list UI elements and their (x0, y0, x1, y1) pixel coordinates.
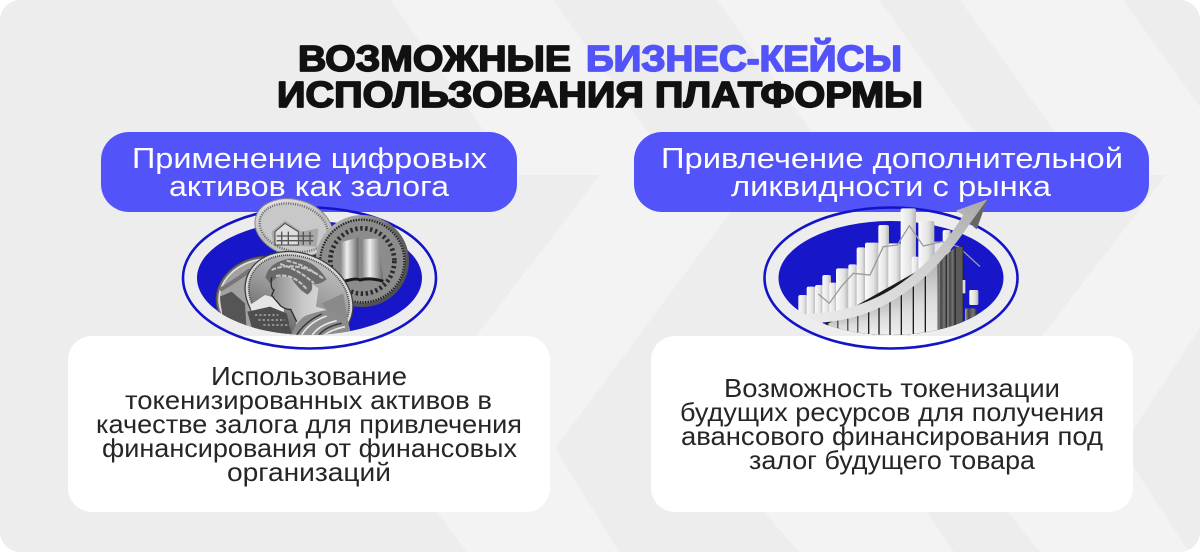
illustration: silver coins in blue oval (183, 190, 436, 361)
small cylinders (963, 280, 978, 322)
text card right: будущих ресурсов для получения (680, 397, 1104, 427)
coin: back landscape (216, 256, 292, 334)
title line 2: ИСПОЛЬЗОВАНИЯ ПЛАТФОРМЫ (277, 74, 923, 115)
illustration: rising bar chart with arrow in blue oval (764, 199, 1018, 348)
heading pill right: ликвидности с рынка (731, 171, 1052, 203)
coin: front portrait (244, 250, 354, 335)
text card left (68, 336, 550, 512)
front bars (825, 245, 963, 337)
heading pill left: активов как залога (169, 171, 450, 203)
text card right: залог будущего товара (749, 445, 1036, 475)
heading pill right: Привлечение дополнительной (661, 143, 1123, 175)
text card left: качестве залога для привлечения (96, 409, 522, 439)
heading pill left (101, 132, 517, 212)
text card left: Использование (211, 361, 407, 391)
drapery (291, 310, 352, 337)
text card right: авансового финансирования под (681, 421, 1103, 451)
panel: left column, collateral (68, 132, 550, 512)
portrait hair (265, 259, 327, 295)
arrow (800, 199, 987, 323)
text card left: токенизированных активов в (125, 385, 492, 415)
back bars (798, 208, 951, 335)
trend line (818, 226, 980, 303)
title (277, 37, 923, 115)
heading pill right (634, 132, 1149, 212)
coin: book (316, 215, 409, 307)
text card right (651, 336, 1133, 512)
text card right: Возможность токенизации (724, 373, 1060, 403)
heading pill left: Применение цифровых (132, 143, 488, 175)
text card left: организаций (227, 457, 391, 487)
landscape with mountain (250, 295, 285, 313)
text card left: финансирования от финансовых (102, 433, 517, 463)
coin: house (254, 198, 332, 256)
title line 1 accent: БИЗНЕС-КЕЙСЫ (586, 37, 902, 79)
panel: right column, liquidity (634, 132, 1149, 512)
portrait skin (272, 278, 344, 335)
title line 1 black: ВОЗМОЖНЫЕ (298, 38, 571, 79)
